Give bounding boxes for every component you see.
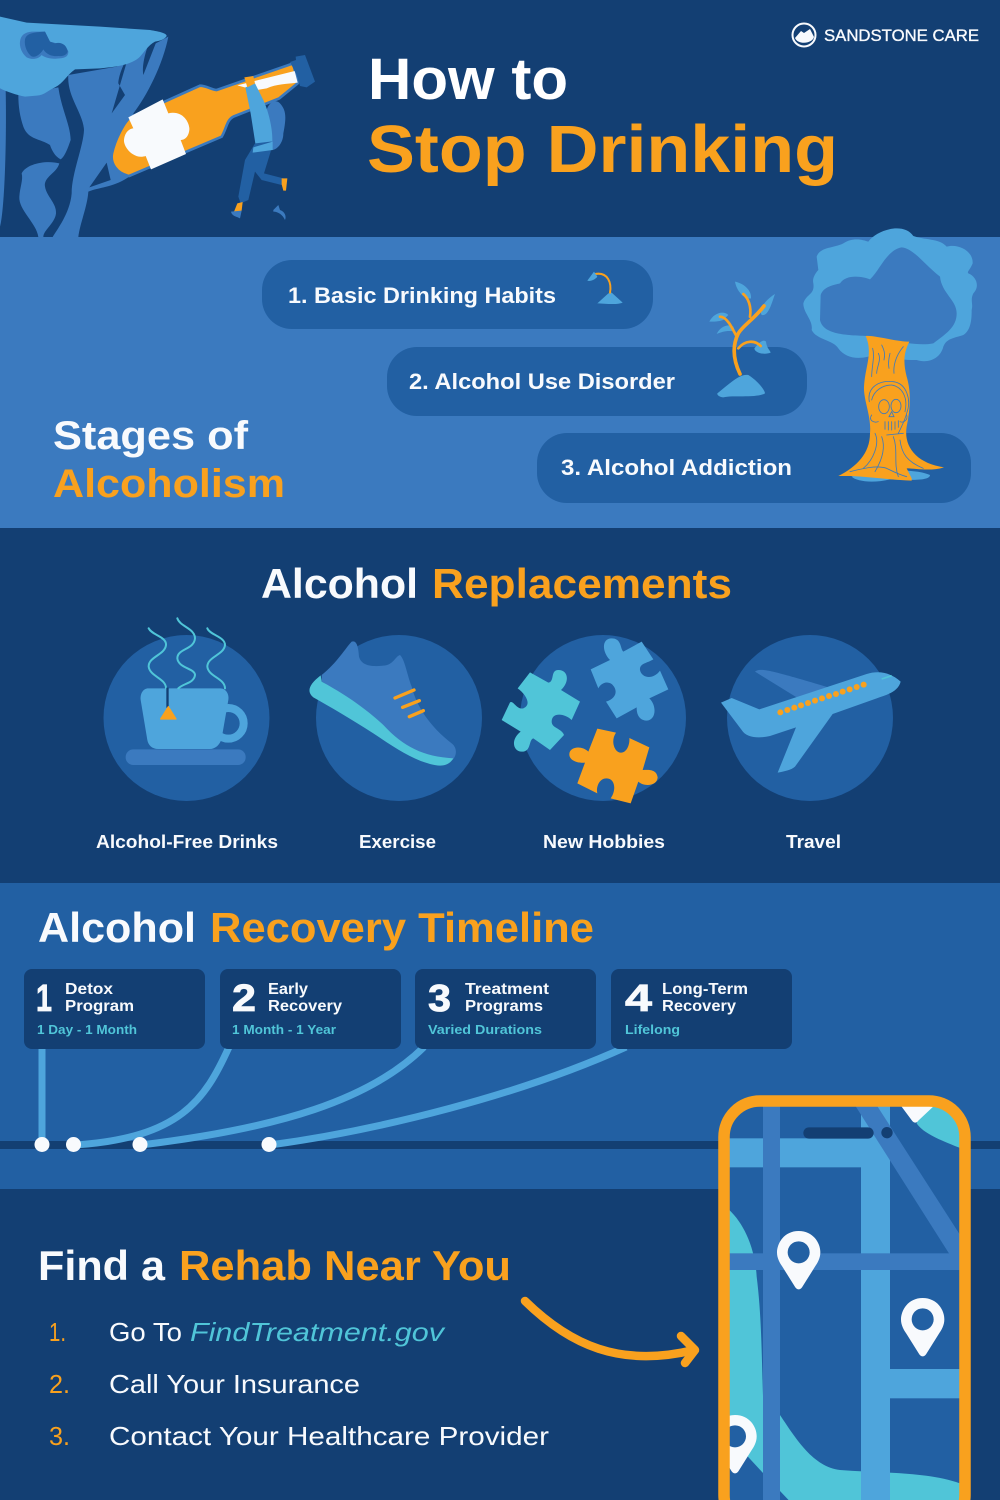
timeline card 4: Lifelong [625,1022,680,1037]
map roads [720,1100,963,1500]
heading: recovery timeline: Alcohol [38,904,196,951]
illustration: cliff, bottle and climber [0,17,315,237]
icon: airplane [721,635,901,801]
title [367,47,838,187]
panel: recovery timeline [0,883,1000,1189]
arrow to phone [525,1301,695,1363]
label: travel: Travel [786,832,841,852]
heading: stages of alcoholism [53,414,285,506]
timeline card 1: 1 [36,978,52,1020]
timeline card 2 [220,969,401,1049]
stage pill 2 [387,347,807,416]
icon: puzzle pieces [502,635,686,803]
heading: stages of alcoholism: Stages of [53,414,249,458]
step 1: 1. [49,1317,66,1347]
tree crown [803,228,977,361]
timeline card 3: Programs [465,998,543,1015]
stage pill 1 [262,260,653,329]
stage pill 1: 1. Basic Drinking Habits [288,283,556,308]
panel: stages of alcoholism [0,237,1000,528]
step 1 [49,1317,446,1347]
climber woman [231,76,287,220]
label: new hobbies: New Hobbies [543,832,665,852]
heading: alcohol replacements: Replacements [432,560,732,607]
bottle [112,55,315,176]
timeline card 4: Long-Term [662,981,748,998]
timeline card 3: Varied Durations [428,1022,542,1037]
heading: alcohol replacements [261,560,732,607]
heading: find a rehab: Rehab Near You [179,1242,511,1289]
tree trunk [838,336,944,481]
timeline dots [34,1137,276,1152]
timeline card 4: Recovery [662,998,736,1015]
icon: running shoe [309,635,482,801]
timeline card 4: 4 [625,978,652,1020]
step 1: FindTreatment.gov [190,1317,446,1347]
label: exercise: Exercise [359,832,436,852]
heading: stages of alcoholism: Alcoholism [53,462,285,506]
heading: find a rehab [38,1242,511,1289]
timeline card 1: Detox [65,981,113,998]
cliff rock [0,37,168,237]
logo: Sandstone Care [792,24,979,46]
icon: small sprout [587,272,623,304]
phone with map [713,1085,967,1500]
timeline road [0,1141,1000,1149]
cliff hole [20,32,68,59]
logo wordmark: SANDSTONE CARE [824,27,979,45]
timeline card 1: Program [65,998,134,1015]
step 2: 2. [49,1369,70,1399]
timeline card 3 [415,969,596,1049]
stage pill 3 [537,433,971,503]
timeline card 3: Treatment [465,981,549,998]
map pins [730,1106,944,1474]
title: Stop Drinking [367,112,838,187]
list: rehab steps [49,1317,549,1451]
logo icon [792,24,816,46]
step 3: 3. [49,1421,70,1451]
phone speaker [803,1127,874,1139]
timeline card 3: 3 [428,978,451,1020]
title: How to [368,47,568,112]
timeline card 1 [24,969,205,1049]
step 2: Call Your Insurance [109,1369,360,1399]
timeline card 4 [611,969,792,1049]
timeline card 2: Recovery [268,998,342,1015]
heading: recovery timeline: Recovery Timeline [210,904,594,951]
timeline connectors [42,1045,626,1145]
panel: header [0,0,1000,237]
stage pill 3: 3. Alcohol Addiction [561,455,792,480]
map water [720,1100,967,1500]
icon: growing plant [709,282,775,397]
cliff top [0,17,167,97]
step 3: Contact Your Healthcare Provider [109,1421,549,1451]
heading: find a rehab: Find a [38,1242,166,1289]
timeline card 1: 1 Day - 1 Month [37,1022,137,1037]
phone frame [724,1101,965,1500]
heading: recovery timeline [38,904,594,951]
icon: tea cup [104,618,270,801]
stage pill 2: 2. Alcohol Use Disorder [409,369,675,394]
icon: tree with skull [803,228,977,482]
timeline card 2: 2 [232,978,256,1020]
puddle [852,470,930,482]
trunk grain and skull [850,345,923,477]
timeline card 2: Early [268,981,308,998]
panel: alcohol replacements [0,528,1000,883]
label: alcohol-free drinks: Alcohol-Free Drinks [96,832,278,852]
panel: find a rehab [0,1189,1000,1500]
heading: alcohol replacements: Alcohol [261,560,418,607]
step 1: Go To [109,1317,182,1347]
timeline card 2: 1 Month - 1 Year [232,1022,336,1037]
